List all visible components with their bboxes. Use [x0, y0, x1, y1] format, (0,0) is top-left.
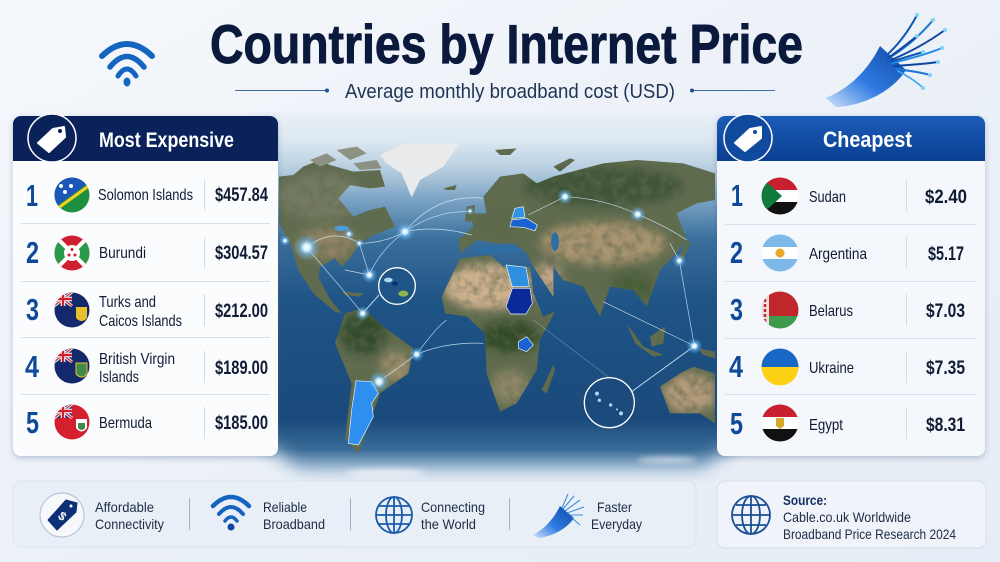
row: Burundi: Burundi — [99, 245, 146, 262]
title: Countries by Internet Price — [210, 13, 803, 75]
subtitle: Average monthly broadband cost (USD) — [345, 81, 675, 103]
benefit: connecting the world: the World — [421, 516, 476, 532]
flag: Burundi — [54, 235, 90, 271]
row: Solomon Islands: Solomon Islands — [98, 187, 193, 204]
row: Argentina: 2 — [730, 235, 743, 270]
header: most expensive: Most Expensive — [99, 129, 234, 152]
header: most expensive — [13, 114, 278, 162]
header: cheapest: Cheapest — [823, 127, 913, 152]
antarctic wisps — [345, 457, 697, 477]
benefit: connecting the world: Connecting — [421, 499, 485, 515]
row: British Virgin Islands: $189.00 — [215, 358, 268, 379]
Sudan — [506, 288, 532, 314]
row: Sudan: 1 — [731, 178, 743, 213]
source text: Broadband Price Research 2024 — [783, 526, 956, 542]
Ukraine — [510, 218, 537, 231]
benefit: reliable broadband: Broadband — [263, 516, 325, 532]
continents — [279, 148, 715, 454]
row: Belarus: 3 — [730, 292, 743, 327]
flag: British Virgin Islands — [54, 348, 90, 384]
panel: source — [717, 481, 986, 548]
row: Ukraine: Ukraine — [809, 360, 854, 377]
row: Egypt — [730, 404, 965, 442]
benefit: affordable connectivity: $ — [55, 509, 70, 524]
inland seas — [334, 226, 559, 254]
row: Bermuda — [26, 404, 268, 440]
row: British Virgin Islands: 4 — [25, 349, 40, 384]
row: British Virgin Islands — [25, 348, 268, 386]
row: Turks and Caicos Islands — [26, 292, 268, 330]
benefit: connecting the world — [376, 497, 485, 533]
ocean — [262, 117, 739, 480]
row: Turks and Caicos Islands: $212.00 — [215, 301, 268, 322]
row: Sudan — [731, 177, 967, 215]
Argentina — [348, 381, 378, 445]
row: Ukraine: 4 — [729, 349, 744, 384]
source text: Source: — [783, 492, 827, 508]
row: Belarus: $7.03 — [926, 301, 965, 322]
benefit: faster everyday — [533, 494, 642, 538]
benefit: reliable broadband — [213, 497, 325, 532]
callout: Solomon Islands — [584, 378, 634, 428]
icon: fibre optic cable — [826, 13, 947, 107]
row: Belarus — [730, 291, 965, 329]
row: Bermuda: 5 — [26, 405, 39, 440]
row: Solomon Islands — [26, 177, 268, 213]
row: British Virgin Islands: Islands — [99, 369, 139, 386]
panel: cheapest — [717, 114, 985, 456]
panel: most expensive — [13, 114, 278, 456]
header: cheapest — [717, 114, 985, 162]
Egypt — [506, 265, 529, 287]
row: Turks and Caicos Islands: 3 — [26, 292, 39, 327]
greenland and arctic islands — [310, 143, 460, 197]
source text — [783, 492, 956, 542]
icon: wifi header — [102, 44, 152, 86]
row: Solomon Islands: $457.84 — [215, 185, 268, 206]
benefit: faster everyday: Everyday — [591, 516, 642, 532]
subtitle — [235, 81, 775, 103]
row: Egypt: Egypt — [809, 417, 843, 434]
row: Sudan: Sudan — [809, 189, 846, 206]
flag: Argentina — [761, 234, 799, 272]
flag: Bermuda — [54, 404, 90, 440]
flag: Sudan — [761, 177, 799, 215]
flag: Belarus — [761, 291, 799, 329]
glowing nodes — [280, 189, 702, 392]
world map — [262, 117, 739, 480]
row: British Virgin Islands: British Virgin — [99, 351, 175, 368]
connection lines — [307, 197, 694, 392]
benefit: affordable connectivity: Affordable — [95, 499, 154, 515]
flag: Egypt — [761, 404, 799, 442]
panel: footer benefits — [13, 481, 696, 547]
row: Burundi — [26, 235, 268, 271]
row: Egypt: 5 — [730, 406, 743, 441]
row: Sudan: $2.40 — [925, 187, 967, 208]
icon: globe — [732, 496, 770, 534]
Belarus — [512, 207, 525, 218]
row: Argentina: Argentina — [809, 246, 867, 263]
flag: Turks and Caicos — [54, 292, 90, 328]
row: Bermuda: Bermuda — [99, 415, 152, 432]
flag: Solomon Islands — [54, 177, 90, 213]
benefit: affordable connectivity — [40, 493, 164, 537]
row: Argentina — [730, 234, 964, 272]
row: Ukraine — [729, 348, 965, 386]
row: Ukraine: $7.35 — [926, 358, 965, 379]
row: Burundi: $304.57 — [215, 243, 268, 264]
row: Bermuda: $185.00 — [215, 413, 268, 434]
row: Belarus: Belarus — [809, 303, 853, 320]
benefit: faster everyday: Faster — [597, 499, 632, 515]
benefit: reliable broadband: Reliable — [263, 499, 307, 515]
benefit: affordable connectivity: Connectivity — [95, 516, 164, 532]
source text: Cable.co.uk Worldwide — [783, 509, 911, 525]
row: Solomon Islands: 1 — [26, 178, 38, 213]
highlighted countries — [348, 207, 537, 445]
Burundi — [518, 337, 533, 352]
row: Egypt: $8.31 — [926, 415, 965, 436]
flag: Ukraine — [761, 348, 799, 386]
callout: Turks and Caicos — [379, 268, 415, 304]
row: Burundi: 2 — [26, 235, 39, 270]
row: Argentina: $5.17 — [928, 244, 964, 265]
row: Turks and Caicos Islands: Caicos Islands — [99, 313, 182, 330]
row: Turks and Caicos Islands: Turks and — [99, 294, 156, 311]
